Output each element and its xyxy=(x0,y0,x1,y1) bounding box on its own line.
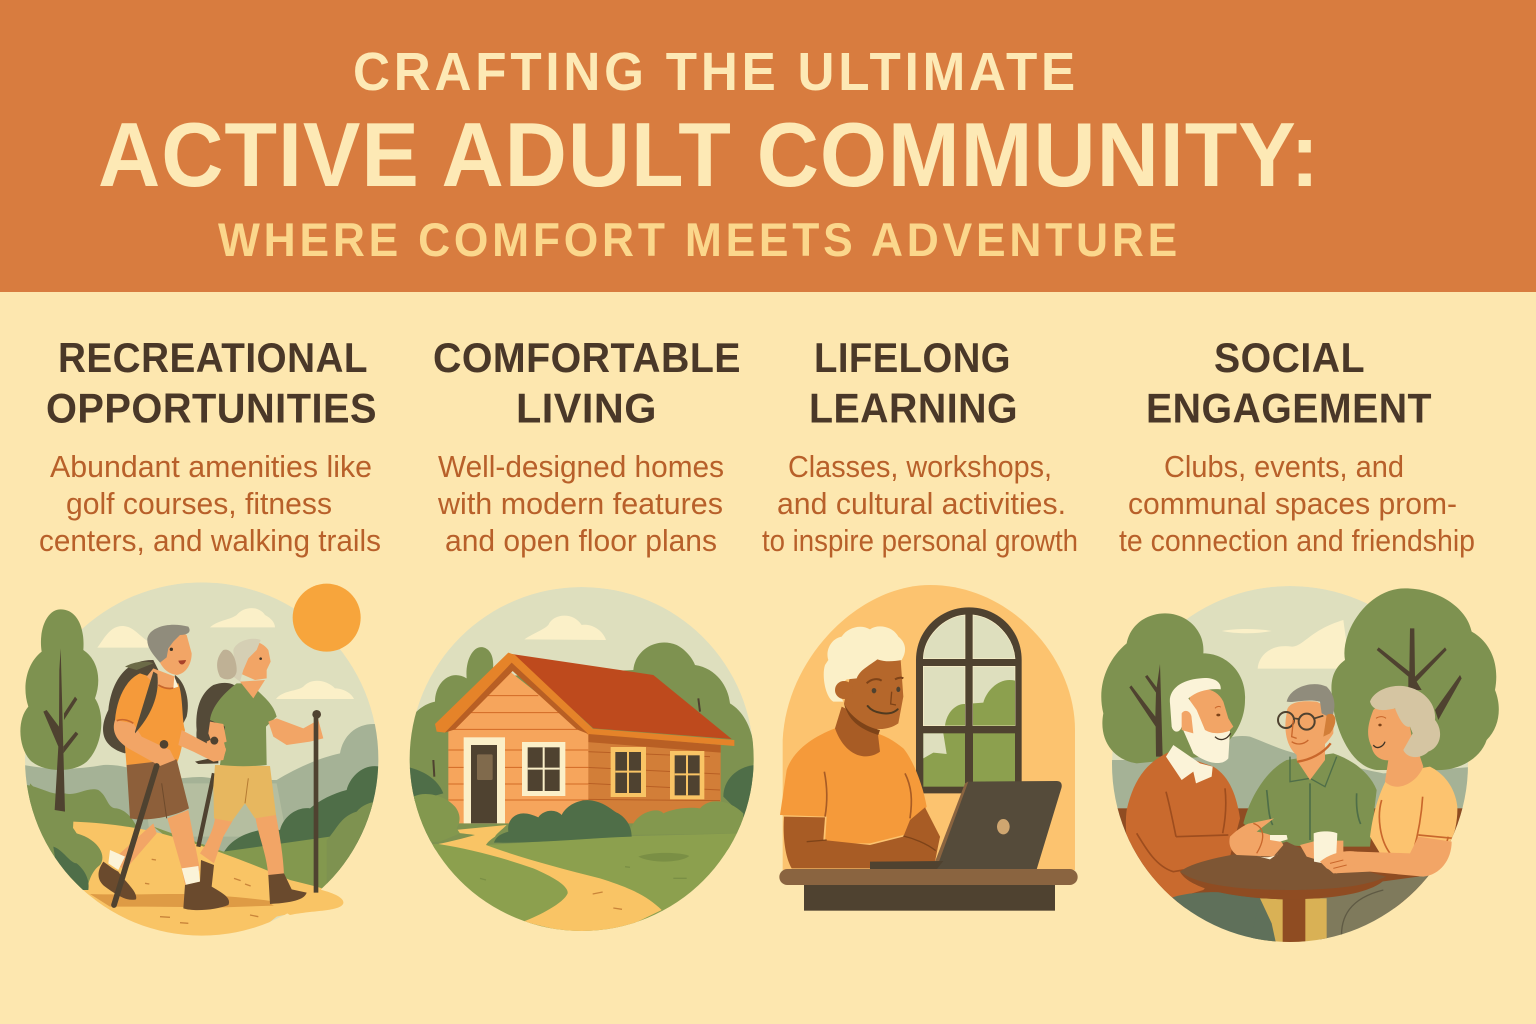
roof xyxy=(512,654,732,739)
woman xyxy=(1368,686,1457,878)
table and legs xyxy=(1170,842,1430,947)
laptop xyxy=(870,781,1062,869)
desk xyxy=(779,869,1078,911)
description: Abundant amenities like xyxy=(50,449,372,484)
heading: ENGAGEMENT xyxy=(1146,384,1432,432)
man in green shirt xyxy=(1243,684,1377,847)
description xyxy=(1119,449,1475,558)
right wall xyxy=(587,733,721,823)
illustration: learner at laptop xyxy=(779,585,1078,911)
house xyxy=(435,653,734,823)
tree right xyxy=(1331,588,1499,770)
heading: OPPORTUNITIES xyxy=(46,384,377,432)
hiker: woman xyxy=(195,639,323,904)
heading xyxy=(809,334,1018,432)
heading: LIVING xyxy=(516,384,657,432)
lawn xyxy=(433,834,737,931)
description xyxy=(437,449,724,558)
tree left xyxy=(1101,613,1245,763)
sand spill beyond circle xyxy=(270,885,343,915)
arched backdrop xyxy=(783,585,1075,870)
hands, arms and cup xyxy=(1229,818,1452,877)
description: Clubs, events, and xyxy=(1164,449,1404,484)
description: te connection and friendship xyxy=(1119,523,1475,558)
heading: LEARNING xyxy=(809,384,1018,432)
tree xyxy=(20,609,101,812)
hiker: man xyxy=(99,625,229,910)
description: centers, and walking trails xyxy=(39,523,381,558)
door xyxy=(464,737,505,823)
window right 1 xyxy=(611,747,646,797)
illustration: hikers on a trail xyxy=(20,582,383,943)
description: and cultural activities. xyxy=(777,486,1066,521)
title line 2: ACTIVE ADULT COMMUNITY: xyxy=(98,105,1320,206)
description: with modern features xyxy=(437,486,723,521)
landscape scene xyxy=(1112,586,1468,908)
title line 1: CRAFTING THE ULTIMATE xyxy=(353,42,1079,102)
panel: social engagement text xyxy=(1119,334,1475,558)
arched window xyxy=(916,607,1022,793)
heading: COMFORTABLE xyxy=(433,334,741,381)
front wall xyxy=(448,672,588,823)
description xyxy=(39,449,381,558)
heading xyxy=(1146,334,1432,432)
description: communal spaces prom- xyxy=(1128,486,1457,521)
person xyxy=(780,626,940,868)
sun xyxy=(293,584,361,652)
man with beard xyxy=(1126,678,1240,900)
window right 2 xyxy=(670,751,704,799)
illustration: friends talking at table xyxy=(1101,586,1499,947)
description: Classes, workshops, xyxy=(788,449,1052,484)
heading: SOCIAL xyxy=(1214,334,1365,381)
description: Well-designed homes xyxy=(438,449,724,484)
illustration: house in landscape xyxy=(407,587,755,940)
description: golf courses, fitness xyxy=(66,486,332,521)
landscape scene xyxy=(23,582,383,943)
heading xyxy=(46,334,377,432)
landscape scene xyxy=(407,587,755,940)
panel: lifelong learning text xyxy=(762,334,1078,558)
heading xyxy=(433,334,741,432)
heading: RECREATIONAL xyxy=(58,334,368,381)
heading: LIFELONG xyxy=(814,334,1011,381)
subtitle: WHERE COMFORT MEETS ADVENTURE xyxy=(218,213,1181,266)
description: to inspire personal growth xyxy=(762,523,1078,558)
panel: comfortable living text xyxy=(433,334,741,558)
description: and open floor plans xyxy=(445,523,717,558)
gable trim xyxy=(435,653,593,735)
front shrubs xyxy=(413,794,743,843)
panel: recreational opportunities text xyxy=(39,334,381,558)
window front xyxy=(522,742,565,796)
header banner xyxy=(0,0,1536,292)
description xyxy=(762,449,1078,558)
garden path xyxy=(438,825,662,940)
